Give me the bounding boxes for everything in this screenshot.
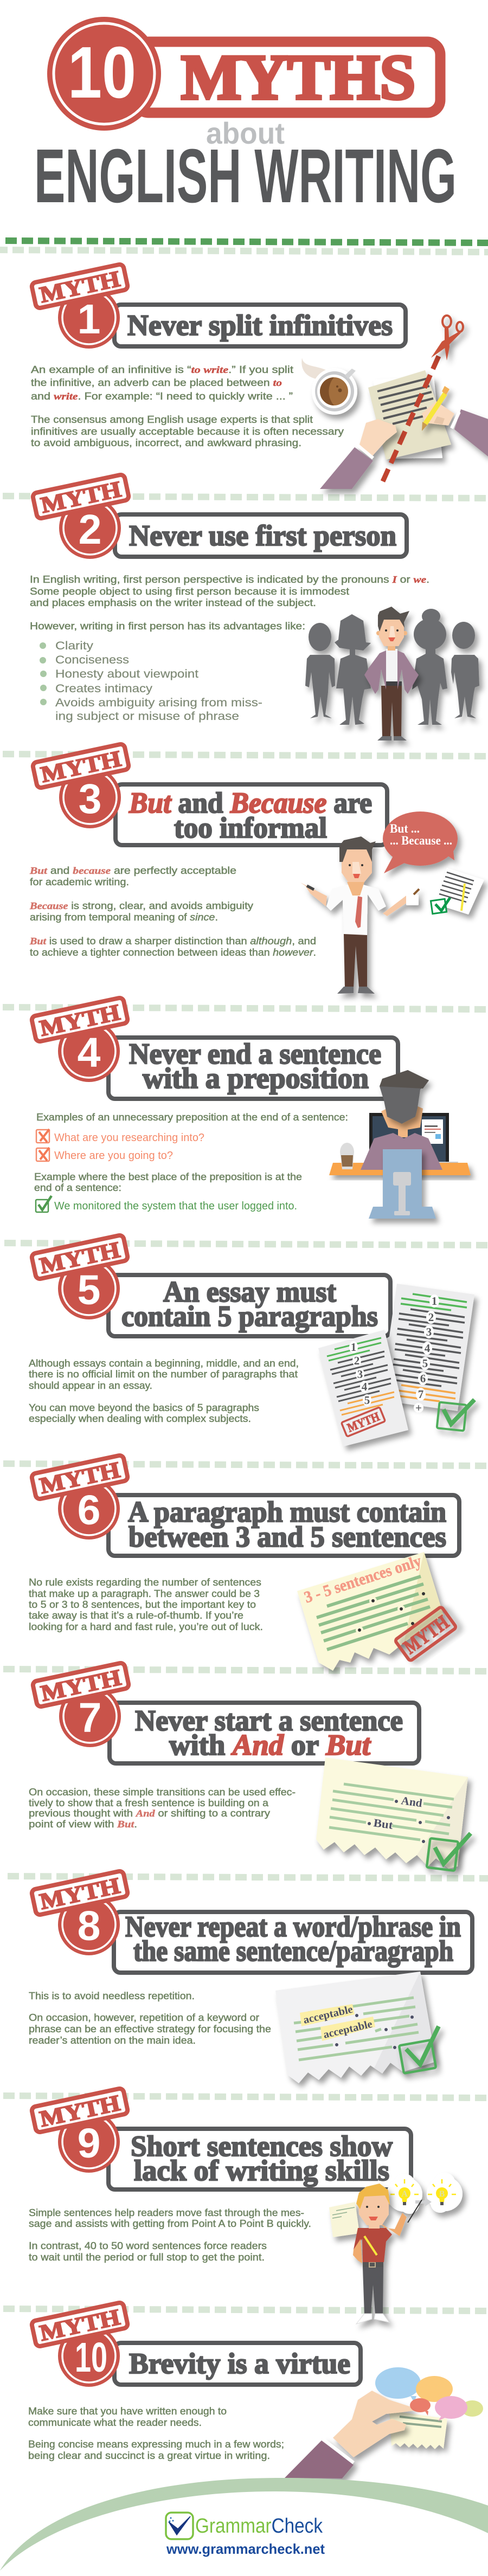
body text: point of view with But. — [29, 1819, 137, 1830]
illustration: five-paragraph page: 5 — [364, 1394, 370, 1407]
myth badge: MYTH — [37, 1238, 123, 1279]
speech bubble: But ... — [390, 822, 420, 835]
heading box — [114, 1910, 472, 1973]
illustration: long essay page: 3 — [426, 1325, 432, 1338]
illustration: man with papers — [300, 836, 484, 994]
heading box: lack of writing skills — [134, 2154, 389, 2187]
body text: to wait until the period or full stop to get the point. — [29, 2252, 265, 2263]
myth badge: MYTH — [37, 2091, 123, 2132]
body text: and write . For example: “I need to quickly write ... ” — [31, 391, 293, 402]
bullet list: Avoids ambiguity arising from miss- — [55, 697, 262, 709]
body text — [34, 1171, 302, 1193]
body text: No rule exists regarding the number of sentences — [29, 1577, 261, 1588]
word: But: But — [373, 1816, 394, 1832]
illustration: five-paragraph page: MYTH — [345, 1409, 382, 1435]
icon: check mark — [427, 1833, 471, 1871]
body text: An example of an infinitive is “ to write .” If you split — [31, 364, 293, 375]
myth badge — [31, 997, 129, 1082]
body text: Some people object to using first person because it is immodest — [30, 586, 349, 597]
myth badge — [31, 1871, 129, 1955]
body text: end of a sentence: — [34, 1182, 121, 1193]
body text: arising from temporal meaning of since. — [30, 912, 218, 923]
illustration: long essay page — [380, 1284, 474, 1414]
heading box: Short sentences show — [131, 2130, 393, 2162]
body text: previous thought with And or shifting to a contrary — [29, 1808, 270, 1819]
body text — [29, 1358, 299, 1424]
myth badge: MYTH — [38, 477, 124, 518]
body text: On occasion, however, repetition of a keyword or — [29, 2012, 259, 2023]
illustration: clouds with bulbs — [387, 2173, 463, 2214]
body text: reader’s attention on the main idea. — [29, 2035, 196, 2046]
myth badge: 5 — [78, 1267, 100, 1313]
heading box: An essay must — [163, 1276, 336, 1308]
heading box: Never end a sentence — [129, 1038, 381, 1070]
myth badge — [31, 1455, 129, 1540]
heading box: too informal — [174, 812, 327, 844]
myth badge — [31, 1235, 129, 1319]
illustration: group of people — [305, 607, 479, 740]
word: And: And — [400, 1794, 423, 1809]
panel: myth 10 — [28, 2302, 483, 2478]
bullet list: Conciseness — [55, 654, 129, 666]
myth badge: MYTH — [37, 267, 123, 308]
body text: communicate what the reader needs. — [28, 2417, 202, 2428]
body text — [29, 1787, 296, 1830]
body text: Examples of an unnecessary preposition at the end of a sentence: — [36, 1112, 348, 1123]
body text: Make sure that you have written enough to — [28, 2406, 227, 2417]
illustration: long essay page: 6 — [420, 1372, 426, 1385]
title badge: 10 myths: 10 — [68, 31, 136, 113]
title — [34, 17, 457, 218]
bullet list: Creates intimacy — [55, 682, 153, 695]
heading box — [108, 1038, 398, 1099]
heading box: the same sentence/paragraph — [133, 1935, 453, 1967]
body text: that make up a paragraph. The answer could be 3 — [29, 1588, 260, 1599]
body text: should appear in an essay. — [29, 1380, 152, 1391]
myth badge: 1 — [78, 296, 100, 343]
myth badge: 4 — [78, 1029, 101, 1076]
illustration: note — [389, 2411, 447, 2449]
panel: myth 5 — [29, 1235, 474, 1446]
body text — [29, 1577, 263, 1632]
illustration: five-paragraph page — [318, 1330, 408, 1446]
myth badge — [32, 474, 130, 559]
heading box: A paragraph must contain — [128, 1496, 446, 1528]
wrong example 2: Where are you going to? — [54, 1150, 173, 1162]
body text: The consensus among English usage experts is that split — [31, 414, 313, 425]
body text: the infinitive, an adverb can be placed between to — [31, 377, 282, 388]
illustration: long essay page: 7 — [418, 1388, 423, 1401]
illustration: torn note — [297, 1552, 457, 1671]
body text: Because is strong, clear, and avoids ambiguity — [29, 900, 253, 911]
icon: left hand and sleeve — [320, 419, 397, 489]
body text — [29, 865, 316, 958]
heading box: Brevity is a virtue — [129, 2347, 350, 2380]
note caption: 3 - 5 sentences only — [302, 1552, 423, 1607]
speech bubble — [383, 812, 458, 873]
illustration: hand and sleeve — [285, 2391, 414, 2478]
body text: Being concise means expressing much in a few words; — [28, 2439, 284, 2450]
illustration: five-paragraph page: 1 — [351, 1341, 356, 1354]
panel: myth 9 — [29, 2088, 463, 2324]
body text — [29, 1991, 271, 2046]
bullet list: ing subject or misuse of phrase — [55, 710, 239, 723]
illustration: long essay page: 2 — [428, 1311, 434, 1324]
heading box — [108, 1495, 459, 1556]
panel: myth 6 — [29, 1455, 459, 1671]
word: acceptable: acceptable — [322, 2018, 374, 2041]
body text: for academic writing. — [30, 877, 129, 887]
panel: myth 2 — [30, 474, 479, 740]
heading box — [108, 2129, 411, 2189]
heading box: But and Because are — [129, 787, 372, 819]
body text: infinitives are usually acceptable because it is often necessary — [31, 426, 344, 437]
body text: to 5 or 3 to 8 sentences, but the important key to — [29, 1599, 256, 1610]
icon: check mark — [437, 1400, 474, 1431]
illustration: long essay page: 4 — [425, 1342, 431, 1355]
body text: You can move beyond the basics of 5 paragraphs — [29, 1402, 259, 1413]
body text: being clear and succinct is a great virtue in writing. — [28, 2450, 270, 2461]
panel: myth 8 — [29, 1871, 472, 2083]
panel: myth 3 — [29, 744, 484, 994]
illustration: torn note — [275, 1972, 439, 2083]
illustration: speech bubbles — [375, 2367, 483, 2421]
wrong example 1: What are you researching into? — [54, 1132, 204, 1144]
stamp: MYTH — [400, 1611, 453, 1659]
icon: coffee cup — [301, 358, 357, 415]
body text: and places emphasis on the writer instead of the subject. — [30, 597, 316, 608]
body text — [28, 2406, 284, 2461]
body text: In English writing, first person perspective is indicated by the pronouns I or we. — [30, 574, 429, 585]
body text: there is no official limit on the number of paragraphs that — [29, 1369, 298, 1380]
illustration: man with pointer — [329, 2184, 422, 2324]
myth badge: MYTH — [37, 1000, 123, 1041]
illustration: person at computer — [329, 1070, 471, 1219]
title word: about: about — [206, 116, 285, 150]
bullet list — [40, 640, 262, 723]
body text: Simple sentences help readers move fast through the mes- — [29, 2207, 304, 2218]
illustration: long essay page: 1 — [432, 1295, 437, 1308]
panel: myth 1 — [31, 264, 488, 489]
illustration: long essay page: + — [415, 1401, 422, 1414]
myth badge: 6 — [78, 1487, 100, 1534]
correct example: We monitored the system that the user logged into. — [54, 1200, 297, 1212]
body text: This is to avoid needless repetition. — [29, 1991, 195, 2001]
heading box: Never split infinitives — [127, 309, 393, 342]
heading box: with And or But — [169, 1729, 371, 1761]
heading box — [108, 1275, 390, 1336]
website url: www.grammarcheck.net — [166, 2541, 325, 2557]
myth badge: MYTH — [37, 1458, 123, 1499]
body text: take away is that it’s a rule-of-thumb. If you’re — [29, 1610, 243, 1621]
body text: However, writing in first person has its advantages like: — [30, 621, 305, 632]
header divider — [0, 241, 488, 252]
icon: right hand with pencil — [422, 386, 488, 456]
body text: But and because are perfectly acceptable — [29, 865, 236, 876]
body text: Example where the best place of the preposition is at the — [34, 1171, 302, 1182]
body text: In contrast, 40 to 50 word sentences force readers — [29, 2240, 267, 2251]
body text: tively to show that a fresh sentence is building on a — [29, 1798, 269, 1808]
myth badge — [31, 2088, 129, 2173]
footer arc — [0, 2478, 488, 2571]
body text: especially when dealing with complex subjects. — [29, 1413, 251, 1424]
myth badge — [31, 2302, 129, 2387]
myth badge: MYTH — [38, 746, 124, 788]
correct example — [36, 1196, 297, 1212]
title badge: 10 myths: MYTHS — [181, 42, 415, 113]
myth badge: 7 — [79, 1695, 101, 1741]
body text — [30, 574, 429, 632]
word: acceptable: acceptable — [302, 2003, 354, 2026]
heading box: with a preposition — [143, 1062, 369, 1094]
illustration: clouds with bulbs: B — [439, 2189, 445, 2199]
body text: sage and assists with getting from Point A to Point B quickly. — [29, 2218, 311, 2229]
body text: looking for a hard and fast rule, you’re out of luck. — [29, 1621, 263, 1632]
illustration: clouds with bulbs: A — [401, 2189, 408, 2199]
icon: logo check box — [166, 2513, 193, 2539]
illustration: long essay page: 5 — [422, 1357, 428, 1370]
myth badge: MYTH — [37, 2305, 123, 2346]
heading box: between 3 and 5 sentences — [129, 1521, 446, 1553]
icon: paper being cut with scissors — [368, 315, 463, 481]
heading box: contain 5 paragraphs — [121, 1300, 378, 1332]
myth badge: MYTH — [37, 1873, 123, 1915]
myth badge: 9 — [78, 2120, 100, 2167]
myth badge — [31, 264, 129, 349]
speech bubble: ... Because ... — [390, 834, 452, 847]
heading box: Never start a sentence — [135, 1704, 403, 1737]
title badge: 10 myths — [47, 17, 440, 131]
bullet list: Clarity — [55, 640, 94, 652]
myth badge: 10 — [75, 2334, 107, 2381]
myth badge: 3 — [79, 776, 101, 822]
icon: check mark — [399, 2026, 439, 2073]
illustration: five-paragraph page: 3 — [357, 1368, 363, 1381]
panel: myth 4 — [31, 997, 471, 1219]
heading box — [115, 784, 387, 845]
body text: to avoid ambiguous, incorrect, and awkward phrasing. — [31, 437, 301, 448]
body text: But is used to draw a sharper distinction than although , and — [29, 936, 316, 946]
panel: myth 7 — [29, 1663, 471, 1871]
illustration: five-paragraph page: 4 — [362, 1380, 368, 1393]
myth badge — [32, 744, 130, 828]
body text — [29, 2207, 311, 2263]
body text: phrase can be an effective strategy for focusing the — [29, 2024, 271, 2034]
myth badge: 8 — [78, 1903, 100, 1949]
illustration: torn note — [316, 1757, 471, 1871]
myth badge — [32, 1663, 130, 1747]
heading box — [110, 1703, 419, 1763]
body text: Although essays contain a beginning, middle, and an end, — [29, 1358, 299, 1369]
myth badge: 2 — [79, 506, 101, 553]
body text: to achieve a tighter connection between ideas than however . — [30, 947, 316, 958]
body text: On occasion, these simple transitions can be used effec- — [29, 1787, 296, 1798]
logo wordmark: GrammarCheck — [195, 2515, 323, 2538]
body text — [31, 364, 344, 448]
bullet list: Honesty about viewpoint — [55, 668, 198, 680]
heading box: Never use first person — [129, 519, 396, 552]
illustration: five-paragraph page: 2 — [354, 1354, 359, 1367]
myth badge: MYTH — [38, 1665, 124, 1706]
footer logo — [166, 2513, 325, 2557]
